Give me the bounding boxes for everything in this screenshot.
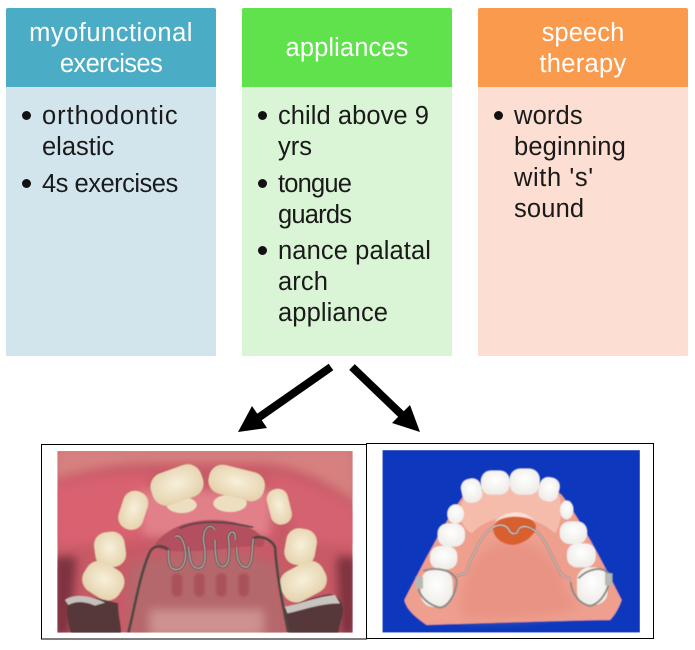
list: appliances: yrs [278,133,312,161]
heading: speech therapy [539,18,627,78]
list: myofunctional exercises: 4s exercises [42,170,178,198]
acrylic pad [155,520,265,551]
list: myofunctional exercises [6,87,216,356]
panel: myofunctional exercises [6,8,216,356]
list: speech therapy: with 's' [514,164,594,192]
list: speech therapy [478,87,688,356]
molar bands [65,594,343,637]
list: appliances: appliance [278,299,388,327]
heading: myofunctional exercises [29,18,193,78]
arrow: left [238,367,331,432]
photo frame: lingual crib in mouth [42,444,366,639]
wire shadows on palate [172,573,249,597]
list: speech therapy: sound [514,195,584,223]
heading: myofunctional exercises: myofunctional [29,18,193,46]
list: appliances: nance palatal [278,237,431,265]
list: appliances: child above 9 [278,102,429,130]
dental cast [404,482,622,625]
molar bands and wire [418,569,609,608]
arrow: right [352,367,420,432]
heading: speech therapy: therapy [539,50,627,78]
list: appliances: tongue [278,170,351,198]
list: speech therapy: words [514,102,583,130]
teeth [421,469,608,607]
list: myofunctional exercises: orthodontic [42,102,179,130]
photo: nance palatal arch appliance on model [382,450,640,633]
crib wires [128,522,288,633]
teeth [77,460,332,607]
heading: myofunctional exercises: exercises [60,50,162,78]
list: appliances: arch [278,268,328,296]
list: appliances: guards [278,201,351,229]
palatal button [493,514,536,545]
panel: speech therapy [478,8,688,356]
illustration layer [41,364,654,640]
list: myofunctional exercises: elastic [42,133,114,161]
panel: appliances [242,8,452,356]
list: appliances [242,87,452,356]
photo: tongue crib appliance in mouth [53,447,357,637]
heading: appliances: appliances [286,34,408,62]
heading: speech therapy: speech [542,18,624,46]
photo frame: nance appliance on model [366,444,654,638]
list: speech therapy: beginning [514,133,626,161]
